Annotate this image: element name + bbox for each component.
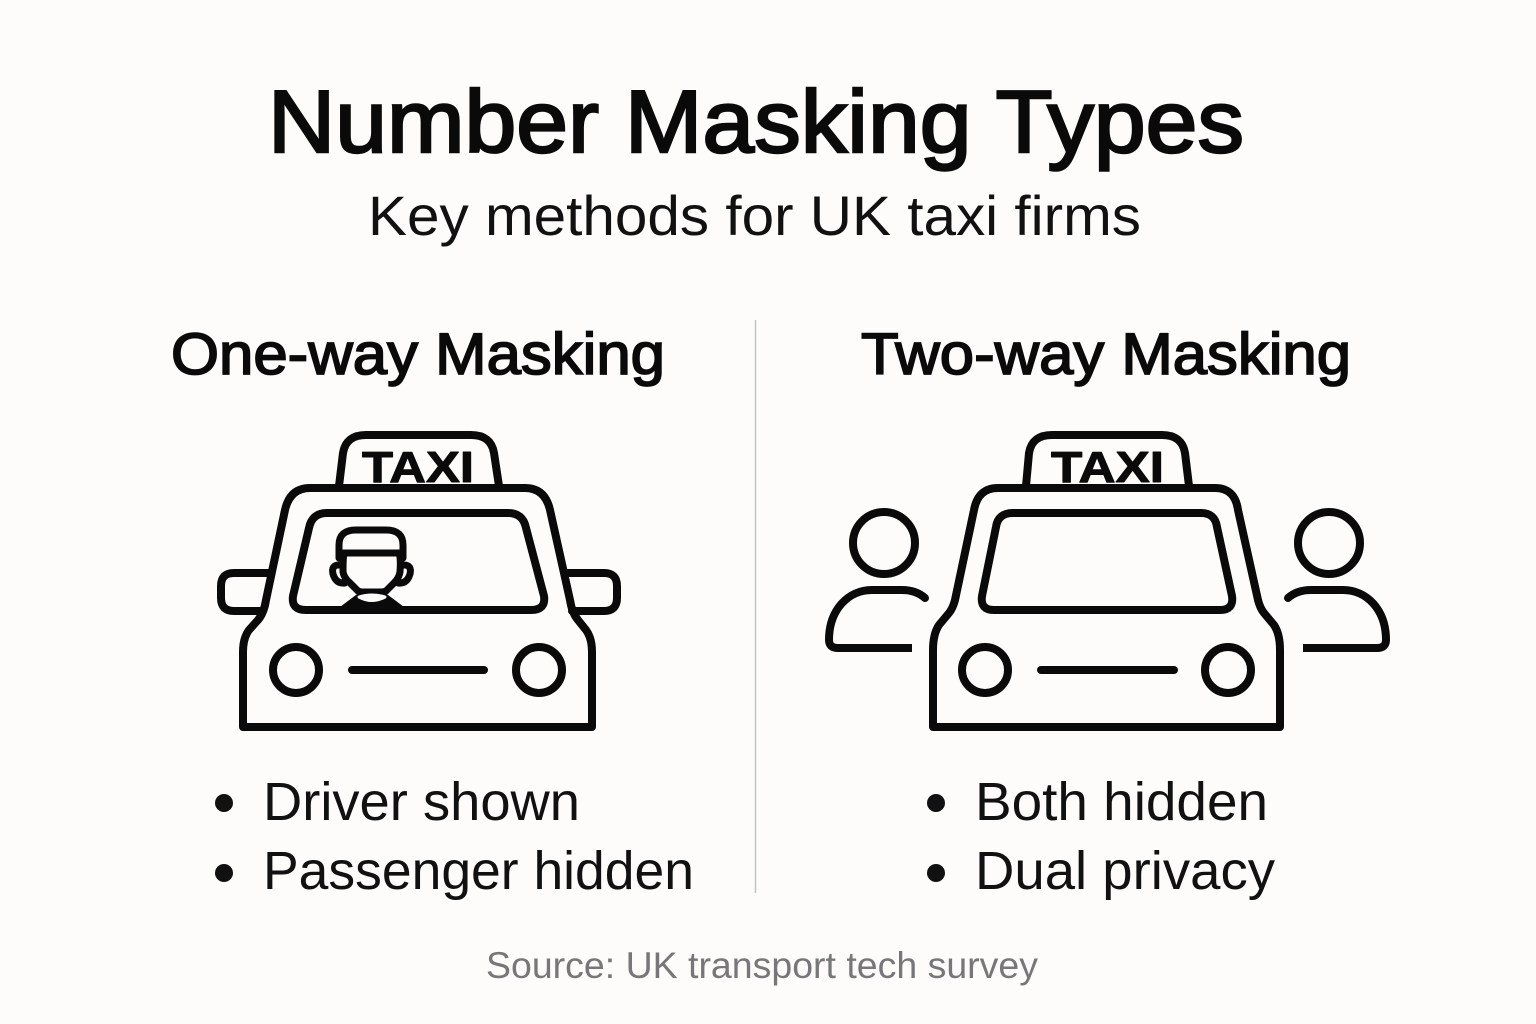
right mirror	[567, 573, 617, 611]
source note: Source: UK transport tech survey	[486, 945, 1038, 986]
title: Number Masking Types	[268, 72, 1244, 171]
left person	[829, 512, 925, 648]
icon: taxi with two hidden people	[829, 435, 1386, 727]
panel: one-way masking	[171, 322, 694, 901]
left headlight	[962, 647, 1008, 693]
list: two-way	[927, 772, 1275, 901]
driver	[333, 530, 410, 608]
grille	[352, 666, 484, 674]
subtitle: Key methods for UK taxi firms	[368, 184, 1141, 247]
list: two-way: Both hidden	[975, 772, 1268, 832]
windshield	[293, 513, 544, 610]
panel: two-way masking	[829, 322, 1386, 901]
right headlight	[516, 647, 562, 693]
taxi roof sign	[1026, 435, 1189, 486]
car body	[933, 488, 1280, 727]
right headlight	[1205, 647, 1251, 693]
heading: two-way masking: Two-way Masking	[861, 322, 1351, 387]
sign label: TAXI	[1051, 443, 1164, 492]
taxi roof sign	[339, 435, 499, 486]
grille	[1041, 666, 1174, 674]
sign label: TAXI	[362, 443, 474, 492]
list: one-way	[215, 772, 694, 901]
left headlight	[273, 647, 319, 693]
windshield	[982, 513, 1232, 610]
car body	[243, 488, 592, 727]
list: one-way: Driver shown	[263, 772, 580, 832]
list: two-way: Dual privacy	[975, 841, 1275, 901]
list: one-way: Passenger hidden	[263, 841, 694, 901]
right person	[1288, 512, 1386, 648]
icon: taxi with visible driver	[221, 435, 617, 727]
heading: one-way masking: One-way Masking	[171, 322, 665, 387]
left mirror	[221, 573, 268, 611]
